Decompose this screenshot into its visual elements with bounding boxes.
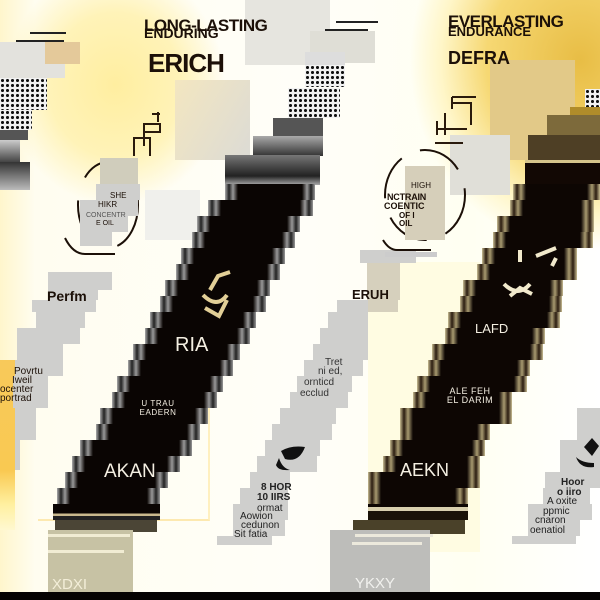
bottle A wordmark: AKAN	[104, 461, 156, 482]
text block: lower right description: Hoor	[561, 477, 584, 488]
infographic circle: left concentration badge: SHE	[110, 191, 126, 200]
bottle B small label	[447, 386, 493, 405]
title right	[448, 12, 563, 68]
reflected wordmark right: YKXY	[355, 575, 395, 592]
cream panel behind right bottle	[368, 262, 480, 552]
text block: lower right description	[530, 477, 584, 536]
infographic circle: right concentration badge: NCTRAIN	[387, 192, 426, 202]
icon: left drop and bowl	[276, 446, 305, 470]
bottle B logo emblem	[502, 246, 558, 298]
bottle A small label	[140, 399, 176, 417]
title left: ENDURING	[144, 25, 219, 41]
bottle B small label: EL DARIM	[447, 395, 493, 405]
marble panel: top centre	[175, 80, 250, 160]
text block: left description	[0, 366, 43, 404]
text block: left description: Iweil	[12, 375, 32, 386]
title left: ERICH	[148, 48, 224, 78]
bottle A small label: U TRAU	[141, 399, 175, 408]
infographic circle: right concentration badge: COENTIC	[384, 201, 424, 211]
marble panel: right gold squares	[490, 60, 575, 160]
text block: lower right description: cnaron	[535, 515, 566, 526]
text block: left description: ocenter	[0, 384, 33, 395]
text block: lower right description: oenatiol	[530, 525, 565, 536]
bottle B base and reflection	[330, 530, 430, 592]
perfume bottle 3: cap and collar	[525, 89, 600, 184]
infographic circle: left concentration badge: CONCENTR	[86, 212, 126, 219]
reflected wordmark left: XDXI	[52, 576, 87, 593]
bottle A small label: EADERN	[140, 408, 176, 417]
left grey text panel	[13, 272, 112, 470]
icon: perfume bottle right	[435, 96, 476, 144]
bottle A logo emblem	[202, 270, 231, 319]
marble panel: mid	[145, 190, 200, 240]
title right: DEFRA	[448, 48, 510, 68]
bottle B small label top: LAFD	[475, 321, 508, 336]
text block: centre description: ni ed,	[318, 366, 342, 377]
text block: lower middle description: cedunon	[241, 520, 279, 531]
text block: left description: portrad	[0, 393, 32, 404]
infographic circle: right concentration badge: HIGH	[411, 181, 431, 190]
infographic circle: left concentration badge: HIKR	[98, 200, 117, 209]
centre grey text panel	[217, 250, 416, 545]
bottom black strip	[0, 592, 600, 600]
infographic circle: left concentration badge: E OIL	[96, 220, 114, 227]
icon: right drop and bowl	[576, 438, 599, 468]
bottle A brand name: RIA	[175, 334, 208, 356]
infographic circle: right concentration badge: OIL	[399, 219, 412, 228]
text block: lower right description: ppmic	[543, 506, 570, 517]
text block: left description: Povrtu	[14, 366, 43, 377]
text: Sit fatia	[234, 529, 267, 540]
bottle B wordmark: AEKN	[400, 460, 449, 480]
perfume bottle B: black glass body	[353, 184, 600, 534]
text block: lower middle description: Aowion	[240, 511, 273, 522]
title right: EVERLASTING	[448, 12, 563, 31]
pale frame around left bottle	[38, 380, 210, 521]
title left: LONG-LASTING	[144, 16, 267, 35]
text block: lower middle description: 8 HOR	[261, 482, 292, 493]
icon: perfume bottle left	[133, 112, 161, 156]
perfume bottle A: black glass body	[53, 184, 315, 532]
bottle A base and reflection	[48, 530, 133, 592]
marble panel: central veins	[450, 135, 510, 195]
text block: lower right description: A oxite	[547, 496, 577, 507]
heading: left perfume label: Perfm	[47, 288, 87, 304]
heading: right perfume label: ERUH	[352, 287, 389, 302]
text block: centre description: ornticd	[304, 377, 334, 388]
bottle B small label: ALE FEH	[449, 386, 490, 396]
text block: centre description	[300, 358, 342, 399]
text block: lower middle description: 10 IIRS	[257, 492, 290, 503]
perfume bottle 1: cap and collar	[0, 32, 80, 190]
right grey text panel	[512, 408, 600, 544]
perfume bottle 2: cap and collar	[225, 21, 378, 185]
text block: lower middle description	[234, 482, 292, 540]
infographic circle: right concentration badge	[382, 149, 466, 257]
text block: lower middle description: ormat	[257, 503, 283, 514]
title right: ENDURANCE	[448, 24, 531, 39]
marble panel: left gold edge	[0, 360, 15, 530]
infographic circle: right concentration badge: OF I	[399, 211, 415, 220]
text block: lower right description: o iiro	[557, 487, 581, 498]
text block: centre description: ecclud	[300, 388, 329, 399]
title left	[144, 16, 267, 78]
marble panel: upper title	[245, 0, 330, 65]
infographic circle: left concentration badge	[64, 158, 140, 255]
